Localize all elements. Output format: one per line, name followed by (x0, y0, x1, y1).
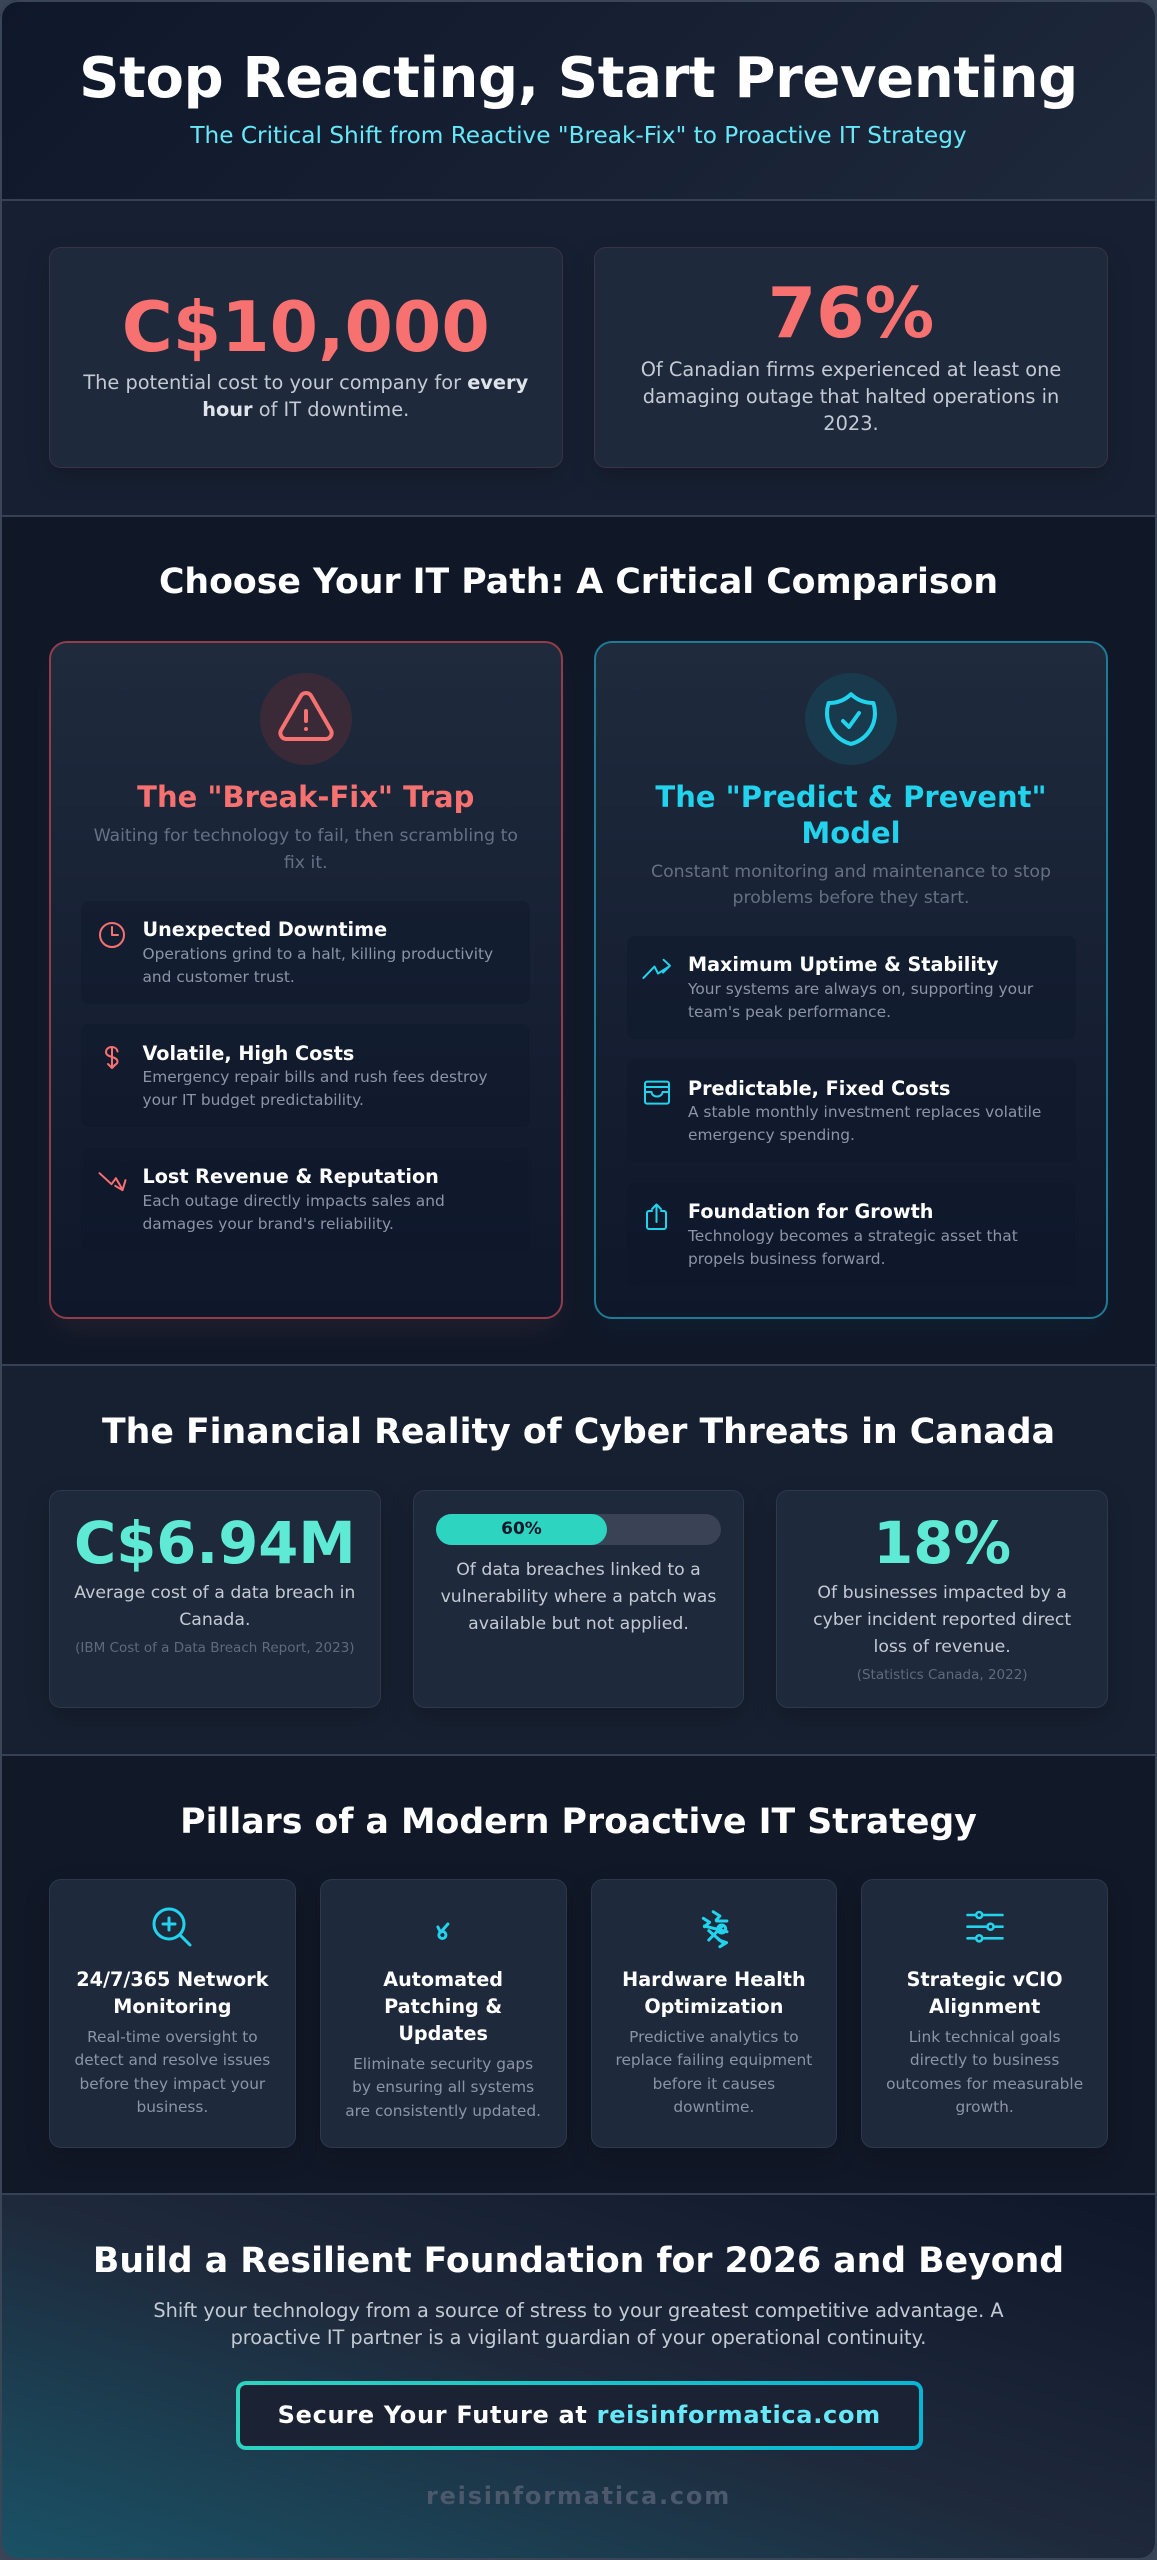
item title: Foundation for Growth (688, 1200, 933, 1223)
stat card: outage share (594, 247, 1108, 468)
comparison heading: Choose Your IT Path: A Critical Comparison (159, 562, 998, 602)
watermark: reisinformatica.com (426, 2482, 731, 2510)
pillar: automated patching (320, 1879, 566, 2148)
item: lost revenue (81, 1148, 530, 1251)
call to action text: Shift your technology from a source of stress to your greatest competitive advantage. A (153, 2299, 1004, 2322)
call to action heading: Build a Resilient Foundation for 2026 and Beyond (93, 2241, 1064, 2281)
pillar: network monitoring (49, 1879, 296, 2148)
icon: sliders (966, 1910, 1004, 1943)
pillar description (345, 2055, 541, 2120)
stat description: Of data breaches linked to a (456, 1560, 701, 1580)
icon: dollar (105, 1046, 118, 1069)
pillar description: replace failing equipment (616, 2051, 812, 2069)
item description: Operations grind to a halt, killing productivity (142, 945, 493, 963)
pillar description: by ensuring all systems (352, 2078, 534, 2096)
pillar title: Optimization (644, 1995, 783, 2018)
item description: your IT budget predictability. (142, 1091, 364, 1109)
pillar description: detect and resolve issues (74, 2051, 270, 2069)
pillar description (74, 2028, 270, 2116)
item: maximum uptime (626, 936, 1076, 1039)
pillar description (886, 2028, 1083, 2116)
item description: emergency spending. (688, 1126, 855, 1144)
pillar description: downtime. (673, 2098, 754, 2116)
stat description: loss of revenue. (874, 1636, 1011, 1656)
stat description (441, 1560, 716, 1634)
progress fill: 60% (501, 1519, 542, 1539)
source note: (IBM Cost of a Data Breach Report, 2023) (75, 1640, 355, 1656)
pillar description: growth. (955, 2098, 1014, 2116)
pillar description: outcomes for measurable (886, 2075, 1083, 2093)
pillar: hardware health (590, 1879, 837, 2148)
item title: Predictable, Fixed Costs (688, 1077, 950, 1100)
stat description: Of businesses impacted by a (817, 1582, 1067, 1602)
item: predictable costs (626, 1059, 1076, 1162)
pillar title: Automated (383, 1968, 503, 1991)
stat description: hour of IT downtime. (202, 398, 409, 421)
stat description (74, 1582, 355, 1630)
card title: The "Break-Fix" Trap (137, 780, 474, 814)
pillar title: Strategic vCIO (907, 1968, 1063, 1991)
card subtitle: Constant monitoring and maintenance to stop (651, 862, 1051, 882)
card: break-fix trap (49, 641, 562, 1319)
card subtitle (94, 826, 518, 873)
icon: hardware chip glyph (702, 1910, 728, 1948)
button label: Secure Your Future at reisinformatica.com (278, 2401, 881, 2429)
pillar title (383, 1968, 503, 2045)
title: Stop Reacting, Start Preventing (79, 46, 1078, 111)
pillar description: Link technical goals (909, 2028, 1061, 2046)
icon: magnifier plus (152, 1908, 192, 1947)
card subtitle: Waiting for technology to fail, then scrambling to (94, 826, 518, 846)
item: foundation for growth (626, 1183, 1076, 1286)
item description: propels business forward. (688, 1250, 885, 1268)
icon: warning triangle (260, 673, 352, 765)
item description: damages your brand's reliability. (142, 1215, 394, 1233)
card: predict and prevent model (594, 641, 1108, 1319)
item description: Technology becomes a strategic asset that (688, 1227, 1018, 1245)
icon: trend down (98, 1172, 126, 1192)
item description (142, 1192, 445, 1233)
panel: headline stats (0, 201, 1157, 517)
progress bar: 60% (436, 1514, 721, 1545)
button (236, 2381, 922, 2450)
stat number: 76% (768, 273, 934, 354)
card title: Model (801, 816, 901, 850)
stat card: breach cost (49, 1490, 381, 1708)
item description: Emergency repair bills and rush fees destroy (142, 1068, 488, 1086)
call to action text: proactive IT partner is a vigilant guardian of your operational continuity. (231, 2326, 926, 2349)
stat card: unpatched breaches (413, 1490, 744, 1708)
card subtitle: problems before they start. (733, 888, 969, 908)
panel: financial reality (0, 1366, 1157, 1756)
progress fill (436, 1514, 607, 1545)
stat card: revenue loss (776, 1490, 1108, 1708)
pillar: vCIO alignment (861, 1879, 1108, 2148)
stat description (83, 371, 528, 421)
pillar title: 24/7/365 Network (76, 1968, 268, 1991)
item title: Maximum Uptime & Stability (688, 953, 999, 976)
item description (688, 1103, 1041, 1144)
item title: Volatile, High Costs (142, 1042, 354, 1065)
panel: pillars (0, 1756, 1157, 2195)
stat description: Average cost of a data breach in (74, 1582, 355, 1602)
item description: Each outage directly impacts sales and (142, 1192, 445, 1210)
item description (142, 1068, 488, 1109)
stat number: C$10,000 (122, 287, 490, 368)
pillar title: Updates (398, 2022, 488, 2045)
stat description: 2023. (823, 412, 879, 435)
item description: team's peak performance. (688, 1003, 891, 1021)
stat description: available but not applied. (468, 1614, 689, 1634)
pillar description: are consistently updated. (345, 2102, 541, 2120)
card title: The "Predict & Prevent" (655, 780, 1047, 814)
pillar description: before they impact your (79, 2075, 265, 2093)
panel: comparison (0, 517, 1157, 1366)
panel: call to action (0, 2195, 1157, 2560)
financial heading: The Financial Reality of Cyber Threats in Canada (102, 1412, 1055, 1452)
icon: upload arrow (646, 1204, 667, 1230)
item description: A stable monthly investment replaces volatile (688, 1103, 1041, 1121)
icon: wallet tray (644, 1080, 670, 1105)
stat description: vulnerability where a patch was (441, 1587, 716, 1607)
stat description: cyber incident reported direct (813, 1610, 1071, 1630)
item title: Unexpected Downtime (142, 918, 387, 941)
item description (142, 945, 493, 986)
pillar description: business. (136, 2098, 208, 2116)
stat description: The potential cost to your company for every (83, 371, 528, 394)
item title: Lost Revenue & Reputation (142, 1165, 439, 1188)
icon: shield check (804, 673, 896, 765)
source note: (Statistics Canada, 2022) (857, 1667, 1028, 1683)
stat description: damaging outage that halted operations in (643, 385, 1059, 408)
stat description: Of Canadian firms experienced at least one (641, 358, 1061, 381)
subtitle: The Critical Shift from Reactive "Break-Fix" to Proactive IT Strategy (190, 122, 967, 149)
stat description: Canada. (179, 1610, 250, 1630)
item description: and customer trust. (142, 968, 295, 986)
pillar title (622, 1968, 806, 2018)
item description (688, 980, 1034, 1021)
item description (688, 1227, 1018, 1268)
stat description (813, 1582, 1071, 1656)
pillars heading: Pillars of a Modern Proactive IT Strategy (180, 1802, 977, 1842)
pillar description: directly to business (910, 2051, 1059, 2069)
icon: trend up (642, 958, 671, 979)
item: unexpected downtime (81, 901, 530, 1004)
stat card: hourly downtime cost (49, 247, 562, 468)
panel: header (0, 0, 1157, 201)
card subtitle (651, 862, 1051, 908)
pillar description (616, 2028, 812, 2116)
stat number: C$6.94M (74, 1510, 356, 1577)
pillar title (76, 1968, 269, 2018)
pillar title (907, 1968, 1063, 2018)
item description: Your systems are always on, supporting your (688, 980, 1033, 998)
stat description (641, 358, 1061, 435)
call to action text (153, 2299, 1004, 2349)
stat number: 18% (873, 1510, 1011, 1577)
item: volatile costs (81, 1024, 530, 1127)
pillar description: Real-time oversight to (87, 2028, 258, 2046)
pillar title: Alignment (929, 1995, 1040, 2018)
icon: patch glyph (436, 1922, 450, 1940)
card title (655, 780, 1047, 850)
pillar description: before it causes (653, 2075, 775, 2093)
pillar title: Patching & (384, 1995, 502, 2018)
pillar description: Predictive analytics to (629, 2028, 799, 2046)
pillar title: Hardware Health (622, 1968, 806, 1991)
pillar title: Monitoring (113, 1995, 232, 2018)
pillar description: Eliminate security gaps (353, 2055, 533, 2073)
card subtitle: fix it. (284, 853, 328, 873)
icon: clock (99, 922, 125, 948)
